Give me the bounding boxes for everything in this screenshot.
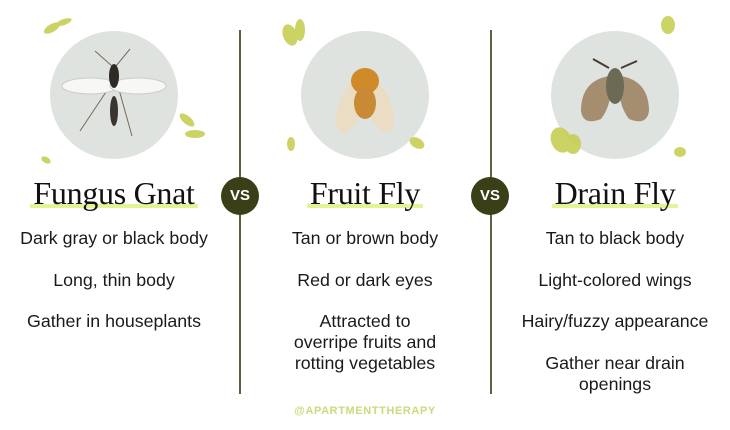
- dividers: [239, 30, 240, 394]
- image: fungus gnat circle: [50, 31, 178, 159]
- text: drain fly traits: openings: [579, 374, 651, 394]
- title: fruit fly: Fruit Fly: [310, 175, 420, 211]
- image: fruit fly circle: [301, 31, 429, 159]
- text: fungus gnat traits: Gather in houseplants: [27, 311, 201, 331]
- text: drain fly traits: Light-colored wings: [538, 270, 692, 290]
- text: fruit fly traits: overripe fruits and: [294, 332, 436, 352]
- text: fruit fly traits: Red or dark eyes: [297, 270, 433, 290]
- title: fungus gnat: Fungus Gnat: [33, 175, 195, 211]
- text: fruit fly traits: [292, 228, 438, 373]
- text: drain fly traits: Hairy/fuzzy appearance: [522, 311, 708, 331]
- text: fungus gnat traits: [20, 228, 208, 331]
- image: drain fly circle: [551, 31, 679, 159]
- text: fruit fly traits: Attracted to: [320, 311, 410, 331]
- text: drain fly traits: [522, 228, 708, 394]
- text: fruit fly traits: Tan or brown body: [292, 228, 438, 248]
- decorative green insects: [42, 16, 686, 164]
- text: drain fly traits: Tan to black body: [546, 228, 684, 248]
- footer credit: @APARTMENTTHERAPY: [294, 405, 436, 417]
- vs badge 2: [471, 177, 509, 215]
- text: fungus gnat traits: Long, thin body: [53, 270, 175, 290]
- text: fruit fly traits: rotting vegetables: [295, 353, 435, 373]
- vs badge 1: VS: [230, 187, 250, 204]
- vs badge 1: [221, 177, 259, 215]
- text: fungus gnat traits: Dark gray or black body: [20, 228, 208, 248]
- vs badge 2: VS: [480, 187, 500, 204]
- title: drain fly: Drain Fly: [555, 175, 675, 211]
- text: drain fly traits: Gather near drain: [545, 352, 685, 372]
